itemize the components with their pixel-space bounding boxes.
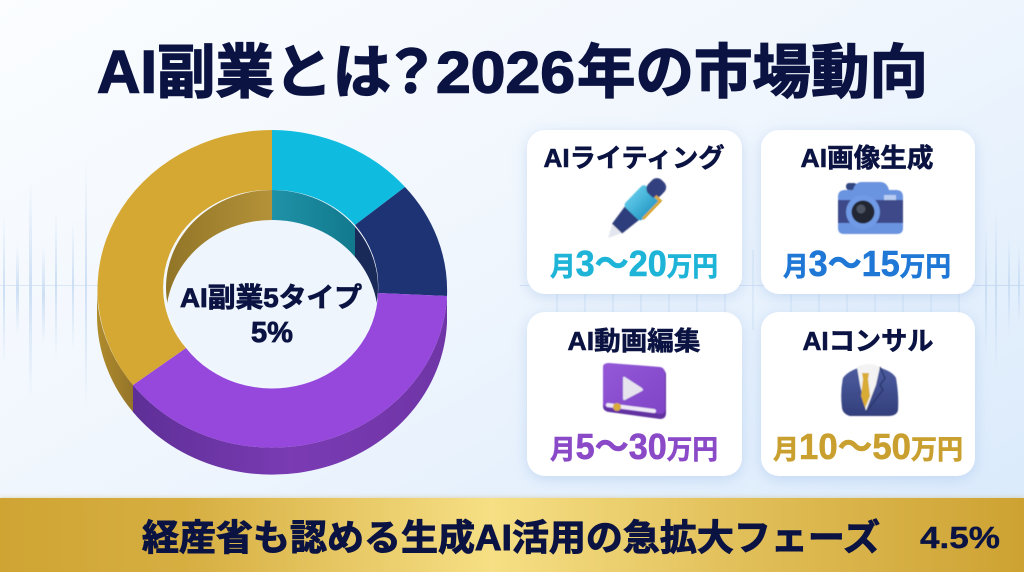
panel: AIコンサル	[761, 312, 975, 476]
segment: purple	[133, 293, 447, 448]
heading: AIコンサル	[802, 326, 934, 356]
inner walls of donut hole	[166, 190, 378, 303]
segment: navy	[355, 187, 447, 296]
heading: AI動画編集	[568, 326, 700, 356]
panel: AIライティング	[527, 130, 742, 294]
segment: gold	[98, 130, 272, 385]
panel: AI画像生成	[761, 130, 975, 294]
icon: video player	[603, 363, 666, 419]
title: ？	[382, 40, 441, 106]
heading: AI画像生成	[800, 143, 934, 173]
icon: camera	[838, 182, 903, 234]
title: 副業とは	[157, 40, 391, 106]
donut chart: AI副業5タイプ	[97, 130, 447, 475]
bottom banner	[0, 498, 1024, 572]
banner message: 経産省も認める生成AI活用の急拡大フェーズ	[142, 517, 880, 558]
icon: pen	[599, 173, 672, 246]
donut center label: AI副業5タイプ	[180, 283, 362, 313]
donut center label	[180, 283, 362, 349]
outer wall: purple	[133, 296, 447, 475]
panel: AI動画編集	[527, 312, 742, 476]
title: 年の市場動向	[577, 40, 928, 106]
value: 月10～50万円	[773, 426, 963, 467]
title: AI	[97, 38, 157, 106]
icon: business suit	[841, 364, 898, 416]
value: 月3～15万円	[783, 243, 951, 284]
heading: AIライティング	[544, 143, 724, 173]
outer wall: gold	[97, 289, 133, 412]
value: 月3～20万円	[550, 243, 718, 284]
title	[97, 38, 928, 106]
value: 月5～30万円	[550, 426, 718, 467]
banner percent: 4.5%	[920, 520, 1000, 555]
title: 2026	[436, 40, 575, 106]
segment: cyan	[272, 130, 405, 225]
donut center label: 5%	[251, 317, 293, 349]
